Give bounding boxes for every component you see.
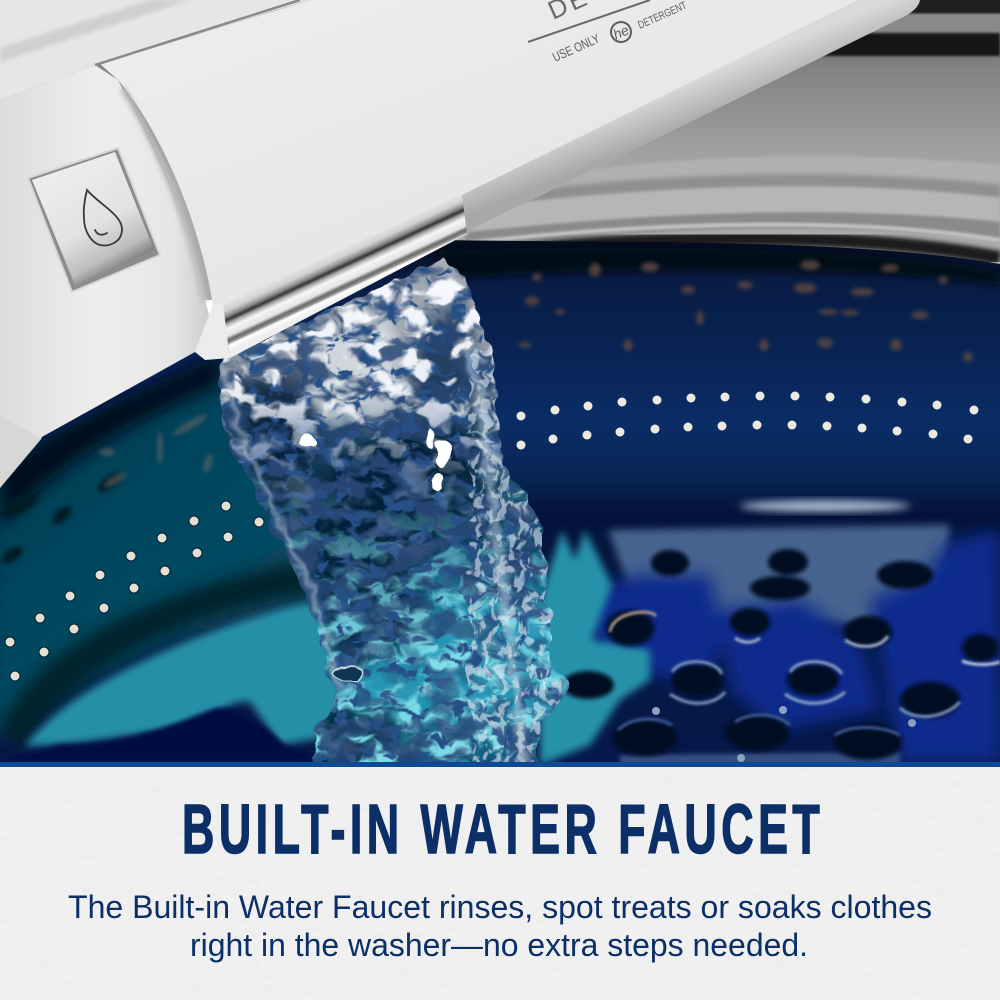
left button panel — [0, 65, 216, 438]
use only text: USE ONLY — [550, 31, 602, 65]
cyan ripples — [250, 471, 570, 762]
label rule — [528, 0, 650, 42]
tub rim — [450, 156, 1000, 258]
rim mid band — [500, 174, 1000, 205]
small round rivets — [652, 706, 916, 762]
dark band above cloth — [0, 560, 330, 750]
navy cloth bottom left — [0, 708, 330, 762]
drum interior — [0, 240, 1000, 765]
water button — [28, 148, 160, 292]
he logo — [608, 19, 634, 45]
dark holes upper left — [0, 469, 125, 567]
white control console — [0, 0, 920, 438]
rim shadow — [440, 247, 1000, 285]
icon: water drop — [84, 190, 122, 245]
lid back seam — [95, 0, 300, 65]
faucet housing lid — [100, 0, 920, 306]
rim highlight — [460, 225, 1000, 244]
lid underside strip — [462, 0, 920, 232]
he logo: he — [611, 21, 632, 42]
blue divider — [0, 762, 1000, 767]
blue cloth blobs — [585, 530, 1000, 763]
tan specks left — [99, 412, 214, 490]
drum dots left — [5, 501, 264, 681]
housing seam shading — [122, 88, 204, 302]
right edge foam — [470, 350, 560, 770]
bottom text panel — [0, 762, 1000, 1000]
faucet foot — [195, 304, 230, 360]
rim dark shadow — [450, 238, 1000, 258]
lower left panel fragment — [0, 405, 42, 488]
dark ripples — [218, 263, 570, 762]
brown specks — [519, 260, 973, 362]
rear plate shading stripe — [0, 0, 190, 62]
rim lower band — [460, 213, 1000, 246]
rim light band — [470, 187, 1000, 232]
stream dark top left — [235, 375, 315, 520]
right edge sheen — [470, 350, 525, 763]
water stream — [218, 258, 570, 762]
gray-blue floor panel — [608, 525, 950, 625]
panel background — [0, 765, 1000, 1000]
perforation dark caps — [562, 549, 998, 760]
button face — [32, 152, 154, 285]
paper texture — [0, 768, 1000, 1000]
stream dark core — [290, 428, 480, 680]
stream dark top right — [410, 300, 475, 430]
drum blue wall — [0, 240, 1000, 765]
stream base — [218, 258, 570, 762]
stream dark bottom left — [312, 690, 406, 762]
white-blue highlight strip — [740, 500, 910, 512]
bottom gray-blue floor — [618, 750, 902, 762]
drum dots right — [516, 392, 978, 450]
white ripples — [219, 267, 566, 762]
stream white foam — [310, 310, 410, 430]
bright highlights — [298, 425, 449, 488]
cyan cloth left — [25, 603, 345, 746]
description line 1: The Built-in Water Faucet rinses, spot treats or soaks clothes — [68, 889, 932, 925]
fine dark ripples — [220, 266, 568, 762]
dark edge top left — [0, 355, 220, 525]
button frame — [28, 148, 160, 292]
rear top plate — [0, 0, 310, 100]
title: BUILT-IN WATER FAUCET — [182, 791, 824, 868]
background: washer tub wall — [0, 0, 1000, 300]
left edge sheen — [224, 370, 338, 690]
teal left wall — [0, 382, 309, 740]
chrome faucet spout — [223, 195, 467, 358]
rim upper band — [530, 156, 1000, 190]
cyan cloth right — [540, 530, 650, 765]
perforation light rings — [610, 612, 1000, 735]
air bubble — [335, 662, 365, 682]
detergent label — [528, 0, 689, 65]
description line 2: right in the washer—no extra steps needed. — [190, 927, 808, 963]
